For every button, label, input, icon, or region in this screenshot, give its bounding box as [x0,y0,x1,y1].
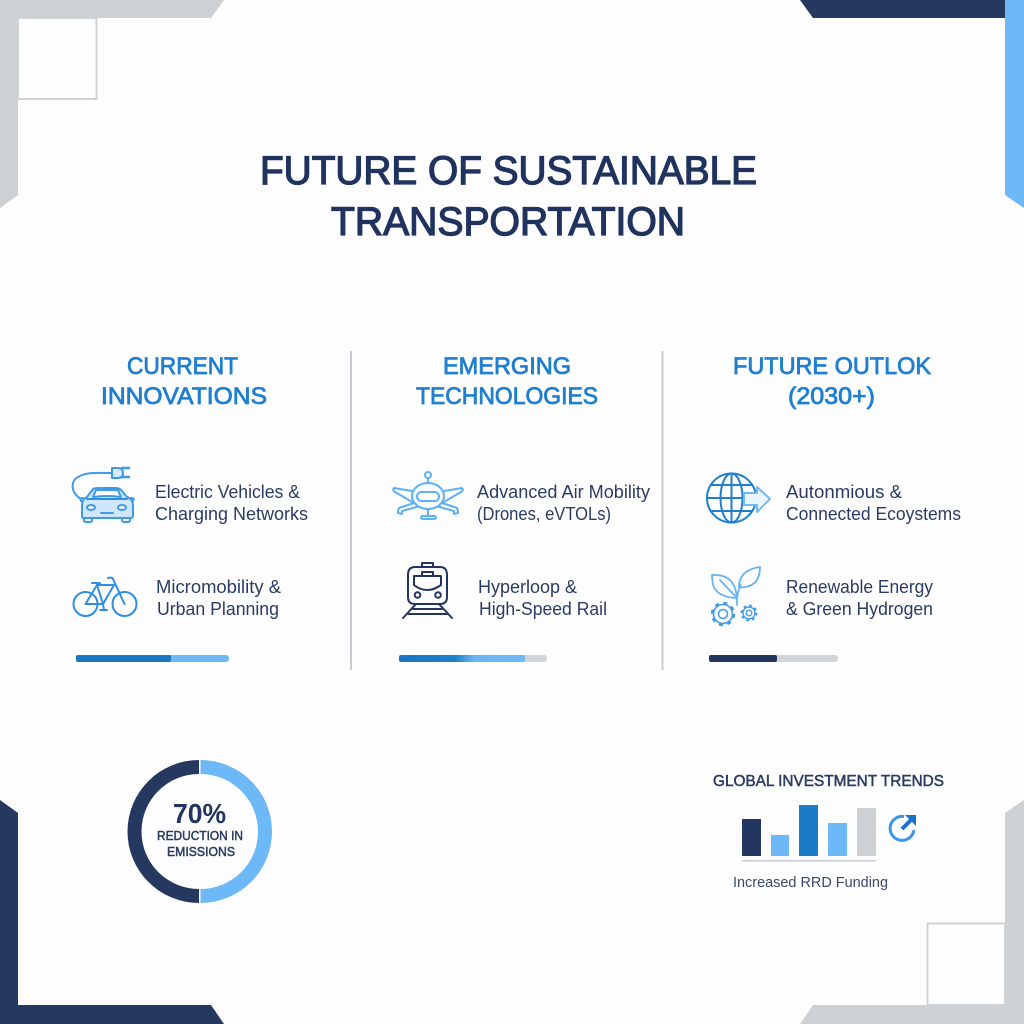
progress bar: current innovations [76,655,229,662]
corner frame: bottom left [0,800,224,1024]
progress bar: future outlook [709,655,838,662]
chart caption: Increased RRD Funding [733,874,888,891]
panel: emerging technologies [393,353,650,662]
donut caption [157,828,243,859]
icon: globe with arrow [707,474,770,522]
heading: future outlook: FUTURE OUTLOK [733,353,931,380]
icon: air mobility drone [393,472,463,519]
text: micromobility: Urban Planning [157,599,279,619]
column divider left [350,351,352,670]
bars [742,805,876,856]
donut caption: REDUCTION IN [157,828,243,843]
title: FUTURE OF SUSTAINABLE [260,149,757,193]
text: electric vehicles [155,482,308,524]
corner frame: bottom right [800,800,1024,1024]
icon: growth arrow [890,815,916,840]
title [260,149,757,244]
icon: bicycle [74,578,136,616]
icon: plant with gears [712,567,760,625]
text: autonomous: Connected Ecoystems [786,504,961,524]
text: advanced air mobility [477,482,650,524]
text: renewable energy: Renewable Energy [786,577,933,597]
text: autonomous [786,482,961,524]
heading: emerging technologies: TECHNOLOGIES [416,383,598,410]
heading: current innovations: CURRENT [127,353,238,380]
heading: current innovations [101,353,267,410]
title: TRANSPORTATION [331,200,685,244]
text: advanced air mobility: Advanced Air Mobility [477,482,650,502]
text: hyperloop [478,577,607,619]
heading: current innovations: INNOVATIONS [101,383,267,410]
donut value: 70% [173,798,226,829]
column divider right [662,351,664,670]
heading: emerging technologies: EMERGING [443,353,571,380]
corner frame: top left [0,0,224,208]
panel: current innovations [73,353,308,662]
icon: electric car with plug [73,468,134,522]
corner frame: top right [800,0,1024,208]
text: micromobility: Micromobility & [156,577,281,597]
heading: future outlook [733,353,931,410]
text: hyperloop: Hyperloop & [478,577,577,597]
text: renewable energy: & Green Hydrogen [786,599,933,619]
text: hyperloop: High-Speed Rail [479,599,607,619]
panel: future outlook [707,353,961,662]
text: micromobility [156,577,281,619]
text: autonomous: Autonmious & [786,482,902,502]
text: electric vehicles: Electric Vehicles & [155,482,300,502]
progress bar: emerging technologies [399,655,547,662]
bar chart: global investment trends [713,773,944,891]
heading: future outlook: (2030+) [788,383,875,410]
icon: train [403,563,452,618]
donut caption: EMISSIONS [167,844,235,859]
heading: emerging technologies [416,353,598,410]
text: electric vehicles: Charging Networks [155,504,308,524]
text: renewable energy [786,577,933,619]
donut chart: 70% reduction in emissions [127,760,272,903]
text: advanced air mobility: (Drones, eVTOLs) [477,504,611,524]
chart title: GLOBAL INVESTMENT TRENDS [713,773,944,790]
